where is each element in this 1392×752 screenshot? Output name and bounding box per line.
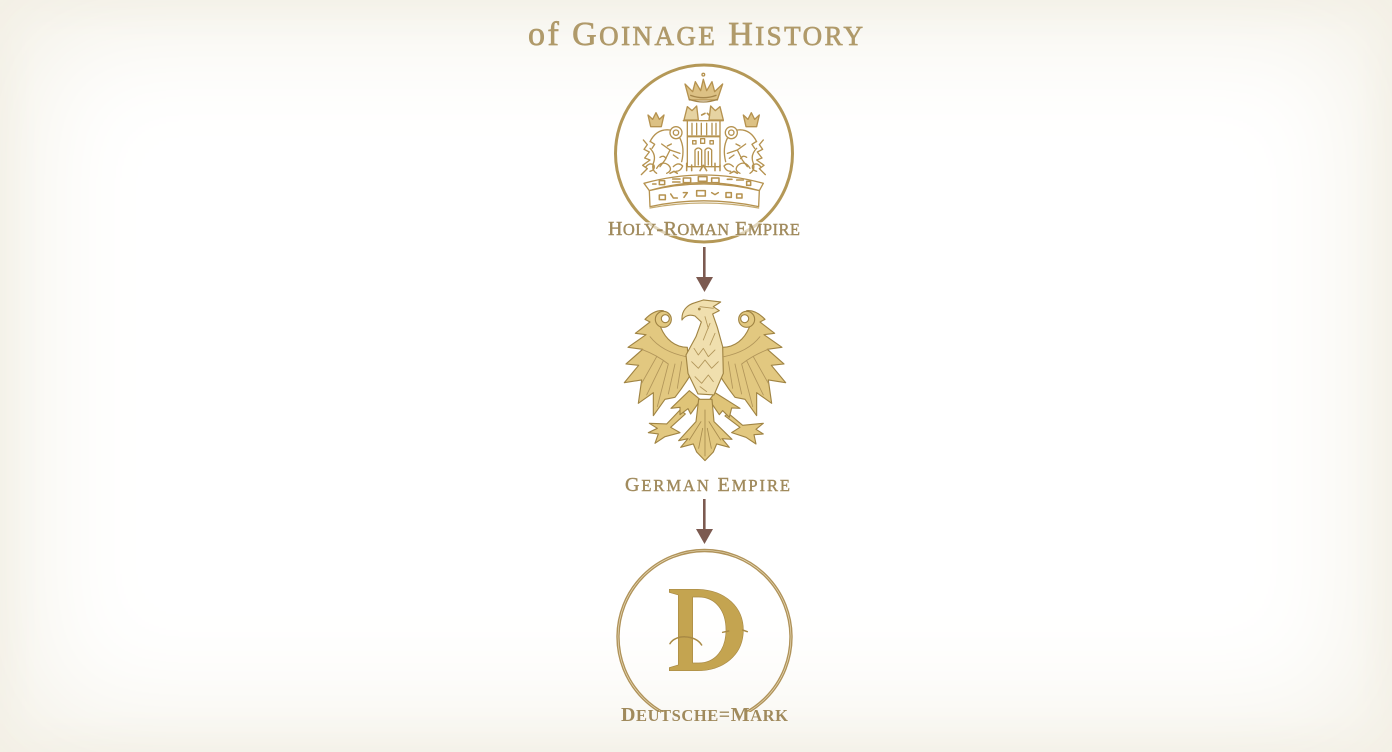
- panel: Deutsche Mark: [618, 550, 791, 726]
- crown band: [644, 175, 763, 208]
- arrow: German Empire to Deutsche Mark: [696, 499, 713, 544]
- icon: letter D: [669, 589, 747, 671]
- top crown: [685, 73, 723, 102]
- tail: [679, 399, 732, 461]
- body and head: [682, 300, 723, 395]
- eagle eye: [698, 308, 700, 310]
- right wing: [721, 311, 786, 416]
- lions and wreath: [641, 127, 765, 175]
- ring: Holy Roman Empire: [616, 65, 792, 242]
- icon: heraldic eagle: [624, 300, 786, 461]
- label: Deutsche Mark: DEUTSCHE=MARK: [621, 704, 788, 726]
- label: German Empire: GERMAN EMPIRE: [625, 474, 790, 496]
- side crowns: [648, 113, 759, 127]
- title: of GOINAGE HISTORY: [528, 16, 863, 53]
- talons: [648, 410, 763, 444]
- ring: Deutsche Mark: [618, 550, 791, 724]
- icon: imperial crown and castle: [641, 73, 765, 208]
- thighs: [671, 391, 740, 417]
- arrow: Holy Roman Empire to German Empire: [696, 247, 713, 292]
- panel: Holy Roman Empire: [606, 65, 802, 242]
- panel: German Empire: [624, 300, 790, 496]
- label: Holy Roman Empire: HOLY-ROMAN EMPIRE: [608, 218, 800, 240]
- left wing: [624, 311, 689, 416]
- castle tower: [683, 106, 723, 167]
